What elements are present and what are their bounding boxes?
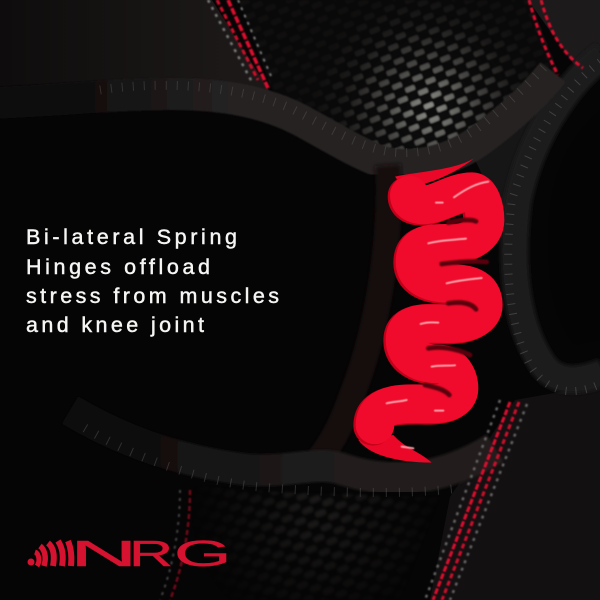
spring hinge — [358, 158, 488, 463]
panel: top-left fabric — [0, 0, 270, 96]
panel: top carbon fibre — [238, 0, 558, 155]
logo wordmark: R — [129, 534, 173, 574]
panel: mesh between cuffs — [470, 80, 550, 230]
panel: lower cuff band — [70, 410, 495, 492]
logo wordmark: N — [70, 534, 138, 574]
headline text — [26, 225, 279, 337]
logo wordmark — [70, 534, 231, 574]
panel: top-right fabric — [528, 0, 600, 70]
stitching: lower-right red seam — [425, 400, 527, 600]
panel: upper cuff band — [0, 66, 553, 165]
logo wordmark: G — [174, 534, 231, 574]
stitching: top-left red seam — [208, 0, 271, 88]
headline text: Bi-lateral Spring — [26, 225, 237, 249]
spring tail tips — [358, 158, 474, 463]
spring highlights — [387, 182, 488, 448]
spring notch shadows — [425, 220, 487, 395]
panel: left cut-out side band — [318, 165, 389, 460]
panel: bottom carbon and fabric — [244, 390, 600, 600]
panel: right cuff cut-out — [548, 110, 600, 345]
logo: NRG — [28, 534, 231, 574]
stitching: lower-left red seam — [160, 490, 190, 600]
spring side wall — [373, 193, 483, 426]
headline text: and knee joint — [26, 313, 204, 337]
headline text: Hinges offload — [26, 255, 210, 279]
headline text: stress from muscles — [26, 284, 279, 308]
icon: signal bars — [28, 541, 71, 566]
panel: right cuff band — [508, 55, 600, 391]
stitching: top-right red seam — [529, 0, 583, 75]
spring face — [375, 192, 485, 425]
